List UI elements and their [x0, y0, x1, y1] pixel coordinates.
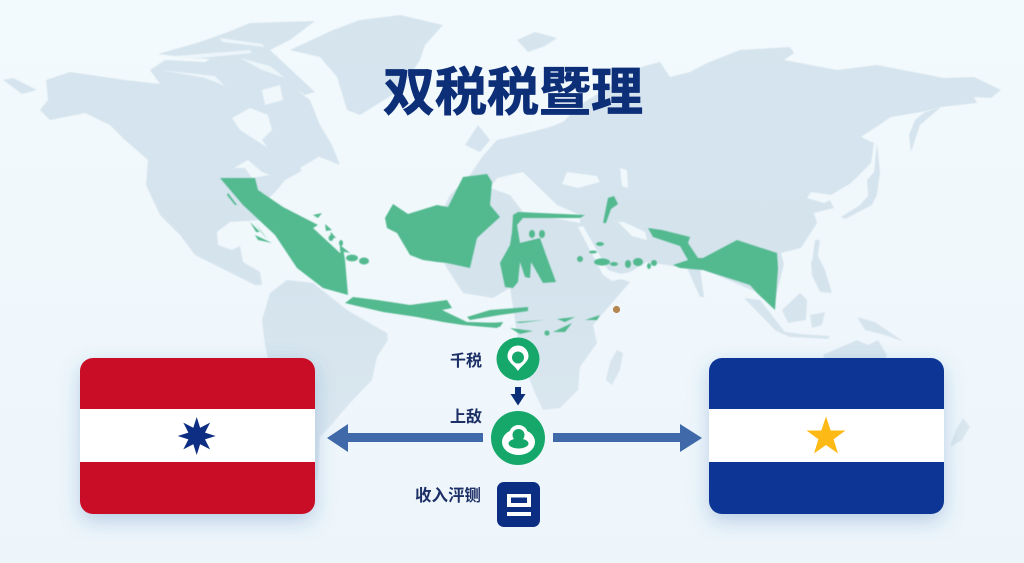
sumatra side islands — [227, 193, 350, 253]
borneo — [385, 174, 500, 268]
south america — [262, 280, 388, 480]
java and lesser sunda — [345, 297, 503, 328]
arctic islands — [158, 21, 315, 95]
title: 双税税暨理 — [383, 64, 643, 122]
greenland — [290, 15, 443, 115]
icon: navy eight pointed star — [178, 417, 216, 455]
icon: green person circle — [491, 411, 545, 465]
great lakes and arctic channels — [234, 160, 270, 178]
label: tax: 千税 — [450, 352, 482, 370]
label: income: 收入泙铡 — [415, 486, 481, 505]
east asia islands — [909, 107, 941, 152]
north america — [40, 50, 340, 285]
icon: gold star — [806, 416, 846, 454]
alaska islet — [3, 78, 37, 94]
arrow: right — [553, 424, 702, 452]
maluku islands — [603, 196, 618, 223]
brown location dot — [613, 306, 620, 313]
papua — [648, 228, 778, 310]
icon: green location pin — [496, 338, 540, 380]
flag: right blue white — [709, 358, 944, 514]
sumatra — [220, 178, 348, 295]
icon: navy document square — [497, 482, 540, 527]
arrow: down — [510, 387, 526, 406]
arrow: left — [327, 424, 483, 452]
flag: left red white — [80, 358, 315, 514]
map seas — [160, 38, 647, 281]
highlighted green islands — [220, 174, 778, 336]
eurasia and africa — [430, 47, 1001, 410]
sulawesi — [500, 212, 585, 288]
label: upper: 上敌 — [450, 408, 482, 426]
